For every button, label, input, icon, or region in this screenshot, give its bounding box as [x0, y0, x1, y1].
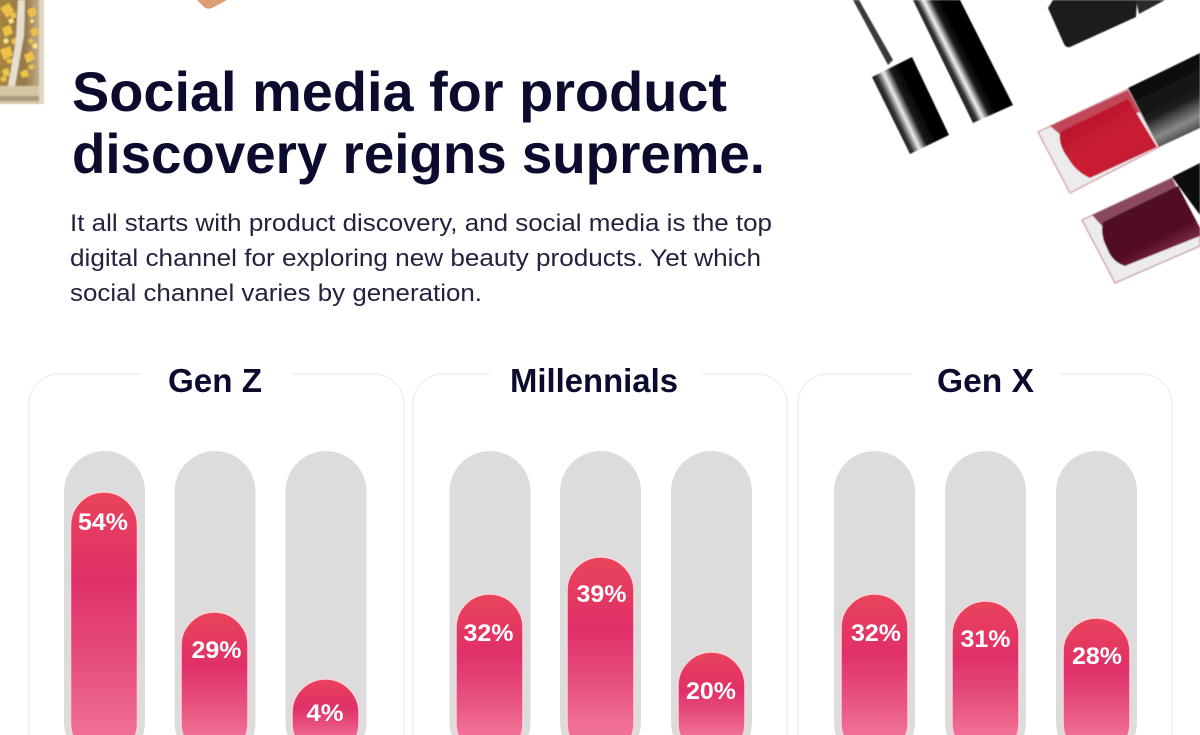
bar: Gen X 28% — [1056, 451, 1137, 735]
image: mascara tube — [913, 0, 1013, 123]
bar: Millennials 39%: 39% — [576, 581, 626, 608]
heading: Millennials: Millennials — [510, 362, 678, 399]
intro text block: It all starts with product discovery, and social media is the top — [70, 210, 772, 237]
bar: Gen X 31% — [945, 451, 1026, 735]
image: gold serum bottle — [0, 0, 44, 104]
title: Social media for product — [72, 60, 727, 123]
bar: Millennials 20%: 20% — [686, 678, 736, 705]
bar: Gen X 31%: 31% — [960, 626, 1010, 653]
bar: Millennials 32%: 32% — [464, 620, 514, 647]
bar: Gen Z 54%: 54% — [78, 509, 128, 536]
image: mascara wand and cap — [853, 0, 949, 154]
heading: Gen X: Gen X — [937, 362, 1034, 399]
intro text block: digital channel for exploring new beauty products. Yet which — [70, 245, 761, 272]
image: dark wine nail polish — [1082, 163, 1200, 283]
bar: Millennials 32% — [450, 451, 530, 735]
intro text block: social channel varies by generation. — [70, 280, 482, 307]
bar: Millennials 39% — [560, 451, 641, 735]
image: peach cosmetic swatch — [197, 0, 227, 9]
bar: Gen X 32% — [834, 451, 915, 735]
bar: Gen Z 29% — [174, 451, 256, 735]
bar: Gen Z 4%: 4% — [306, 700, 344, 727]
bar: Gen X 28%: 28% — [1072, 643, 1122, 670]
panel: Gen Z — [29, 362, 404, 735]
title — [72, 60, 765, 185]
title: discovery reigns supreme. — [72, 122, 765, 185]
panel: Millennials — [413, 362, 787, 735]
panel: Gen X — [798, 362, 1172, 735]
bar: Gen X 32%: 32% — [851, 620, 901, 647]
bar: Gen Z 4% — [286, 451, 366, 735]
bar: Millennials 20% — [671, 451, 752, 735]
image: red nail polish — [1038, 53, 1200, 193]
bar: Gen Z 29%: 29% — [192, 637, 242, 664]
image: black lipstick — [1048, 0, 1165, 47]
bar: Gen Z 54% — [64, 451, 145, 735]
heading: Gen Z: Gen Z — [168, 362, 262, 399]
intro text block — [70, 210, 772, 307]
